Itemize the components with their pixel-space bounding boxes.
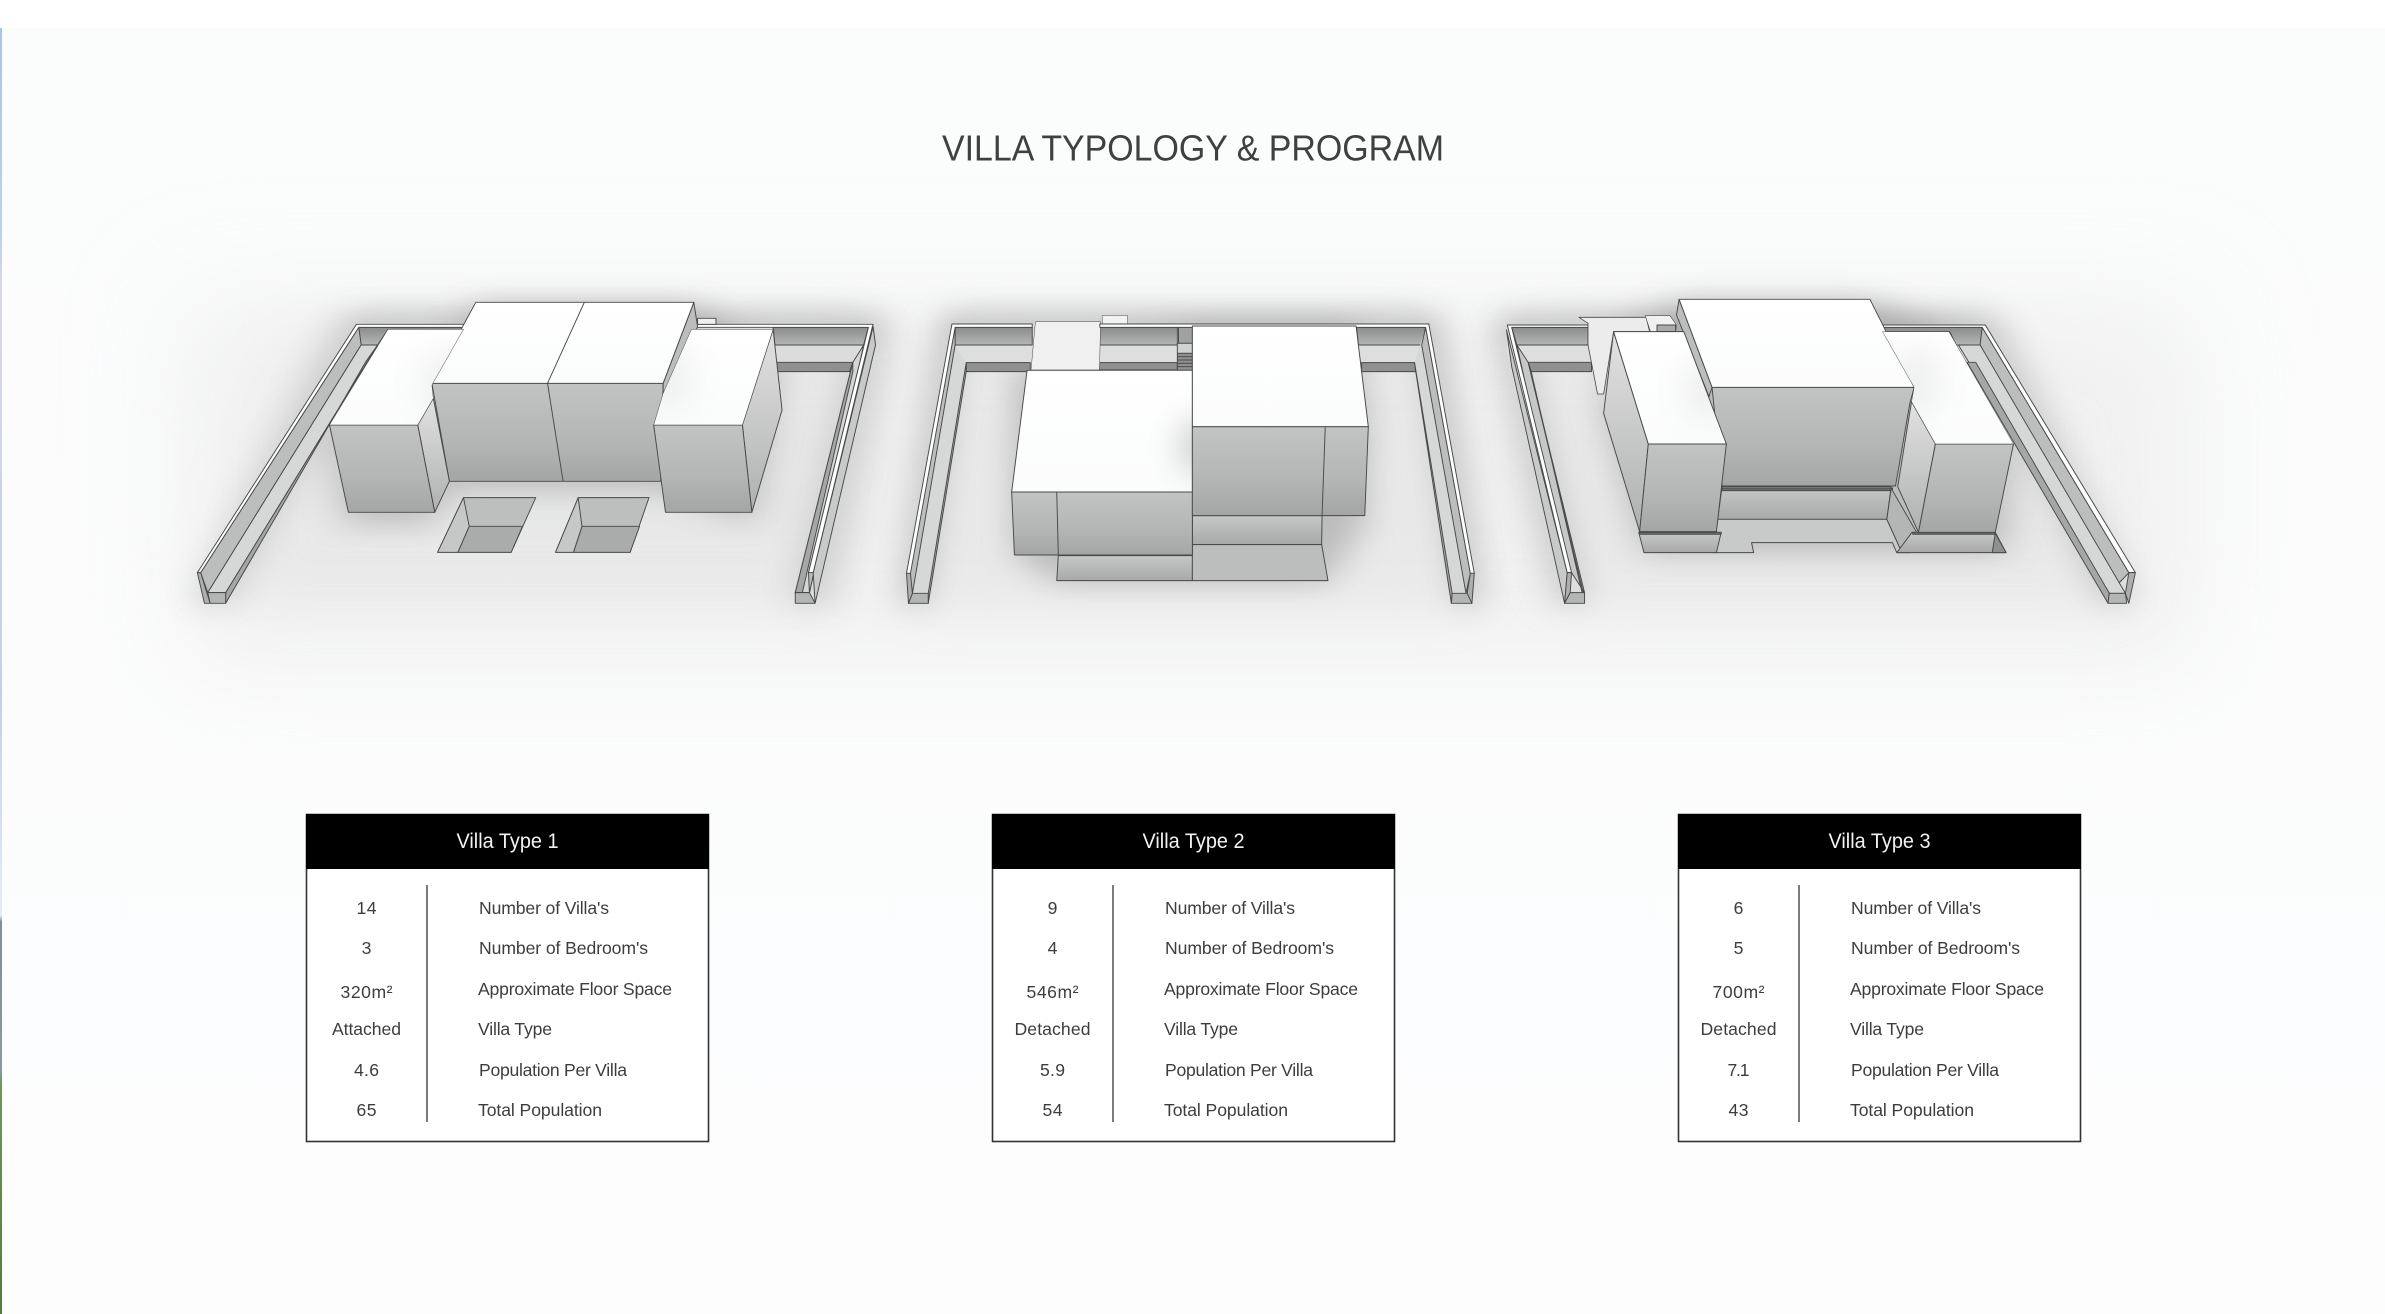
- labels column: Number of Bedroom's: [1851, 938, 2020, 958]
- labels column: Number of Villa's: [479, 898, 609, 918]
- labels column: [478, 898, 672, 1120]
- labels column: Number of Bedroom's: [1165, 938, 1334, 958]
- labels column: Villa Type: [478, 1019, 552, 1039]
- values column: Detached: [1700, 1019, 1776, 1039]
- values column: 4.6: [354, 1060, 379, 1080]
- values column: 700m²: [1712, 982, 1765, 1002]
- table header: [1678, 814, 2081, 869]
- divider: [1798, 885, 1800, 1122]
- values column: 320m²: [340, 982, 393, 1002]
- left edge colour strip: [0, 28, 2, 1314]
- values column: 4: [1048, 938, 1058, 958]
- values column: 6: [1734, 898, 1744, 918]
- labels column: Total Population: [478, 1100, 602, 1120]
- labels column: Number of Villa's: [1165, 898, 1295, 918]
- labels column: Villa Type: [1850, 1019, 1924, 1039]
- values column: [1014, 898, 1090, 1120]
- values column: [332, 898, 401, 1120]
- values column: 14: [356, 898, 377, 918]
- labels column: Total Population: [1164, 1100, 1288, 1120]
- table header: [306, 814, 709, 869]
- values column: 5.9: [1040, 1060, 1065, 1080]
- labels column: Villa Type: [1164, 1019, 1238, 1039]
- values column: 54: [1042, 1100, 1063, 1120]
- values column: 5: [1734, 938, 1744, 958]
- values column: 7.1: [1728, 1060, 1750, 1080]
- labels column: Population Per Villa: [1851, 1060, 1999, 1080]
- values column: 43: [1728, 1100, 1749, 1120]
- divider: [1112, 885, 1114, 1122]
- table: villa type 3: [1678, 814, 2081, 1142]
- labels column: [1164, 898, 1358, 1120]
- values column: 65: [356, 1100, 377, 1120]
- values column: Attached: [332, 1019, 401, 1039]
- labels column: Approximate Floor Space: [478, 979, 672, 999]
- values column: 546m²: [1026, 982, 1079, 1002]
- table header: Villa Type 3: [1828, 830, 1930, 853]
- values column: Detached: [1014, 1019, 1090, 1039]
- labels column: Number of Villa's: [1851, 898, 1981, 918]
- title: VILLA TYPOLOGY & PROGRAM: [942, 128, 1444, 168]
- labels column: Population Per Villa: [1165, 1060, 1313, 1080]
- 3D model: villa type 3: [1506, 299, 2135, 603]
- 3D model: villa type 1: [197, 302, 878, 605]
- values column: [1700, 898, 1776, 1120]
- labels column: Approximate Floor Space: [1850, 979, 2044, 999]
- ground shading: [180, 300, 2200, 670]
- labels column: Approximate Floor Space: [1164, 979, 1358, 999]
- divider: [426, 885, 428, 1122]
- table: villa type 1: [306, 814, 709, 1142]
- values column: 3: [362, 938, 372, 958]
- table header: Villa Type 1: [456, 830, 558, 853]
- table header: Villa Type 2: [1142, 830, 1244, 853]
- 3D model: villa type 2: [906, 315, 1474, 607]
- table header: [992, 814, 1395, 869]
- labels column: Number of Bedroom's: [479, 938, 648, 958]
- values column: 9: [1048, 898, 1057, 918]
- table: villa type 2: [992, 814, 1395, 1142]
- labels column: Total Population: [1850, 1100, 1974, 1120]
- labels column: [1850, 898, 2044, 1120]
- labels column: Population Per Villa: [479, 1060, 627, 1080]
